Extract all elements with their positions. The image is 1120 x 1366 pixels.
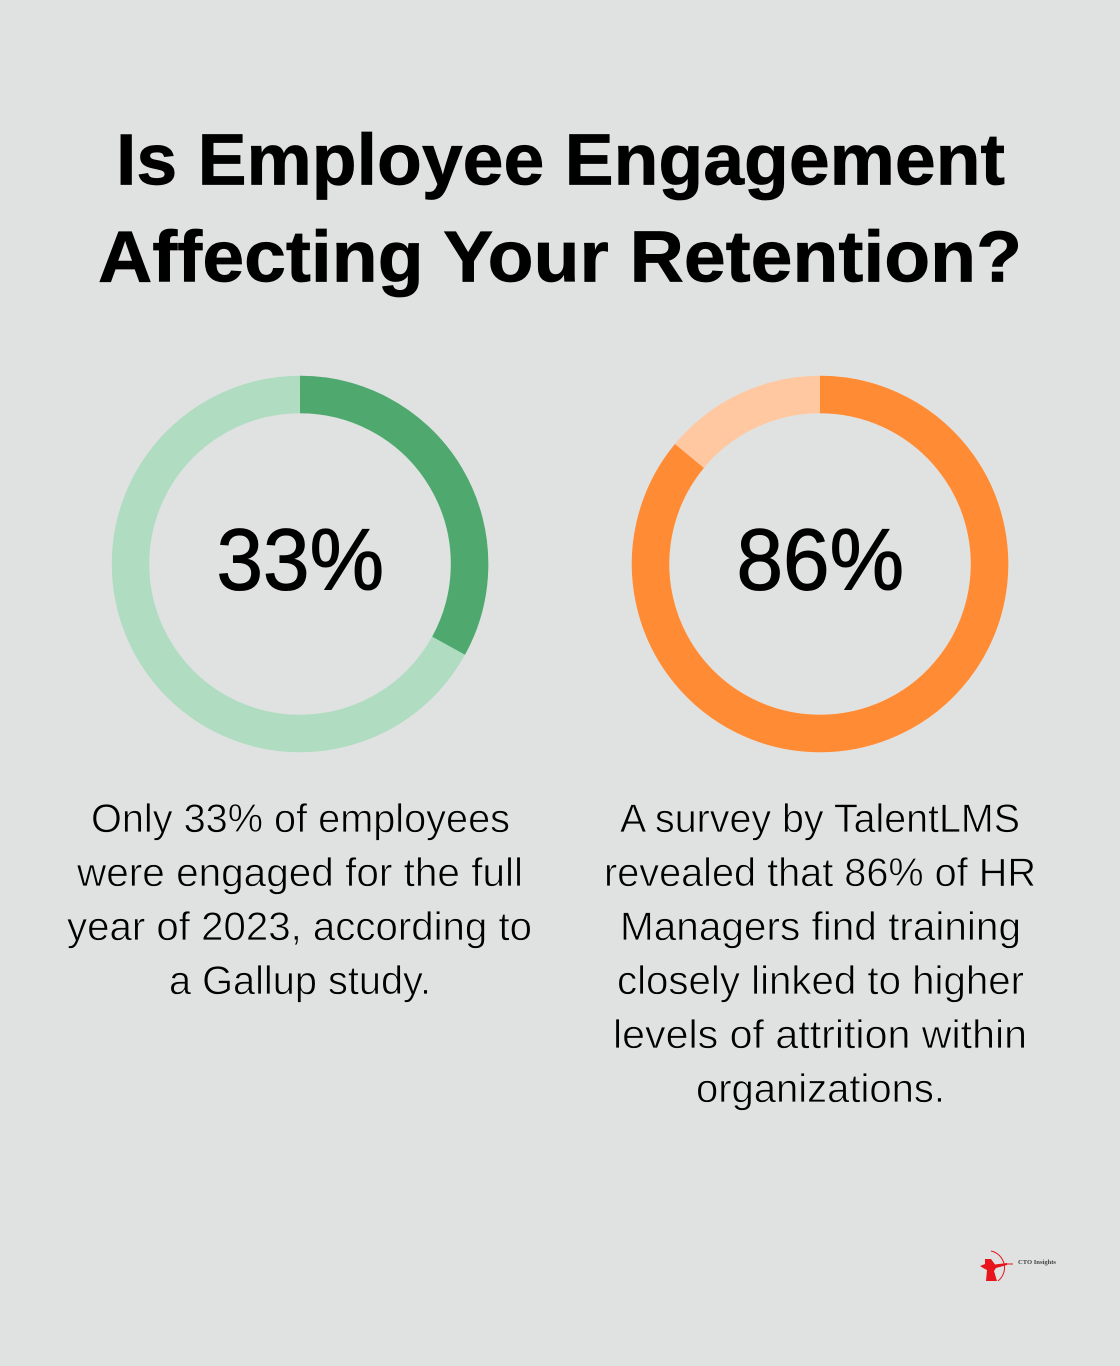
text block: Gallup study: year of 2023, according to <box>67 905 532 949</box>
logo: CTO Insights <box>980 1251 1057 1281</box>
text block: TalentLMS survey: A survey by TalentLMS <box>620 797 1020 841</box>
title: Is Employee Engagement <box>116 120 1005 200</box>
text block: Gallup study <box>67 797 532 1003</box>
text block: Gallup study: a Gallup study. <box>169 959 431 1003</box>
donut chart: 33%: 33% <box>216 512 384 608</box>
text block: TalentLMS survey: revealed that 86% of HR <box>604 851 1036 895</box>
donut chart: 86% <box>650 394 990 734</box>
donut chart: 33% <box>130 394 470 734</box>
text block: TalentLMS survey: Managers find training <box>620 905 1021 949</box>
text block: TalentLMS survey: organizations. <box>696 1067 945 1111</box>
icon: archer <box>980 1251 1013 1281</box>
text block: TalentLMS survey: closely linked to higher <box>617 959 1024 1003</box>
text block: TalentLMS survey: levels of attrition within <box>613 1013 1027 1057</box>
text block: Gallup study: were engaged for the full <box>76 851 523 895</box>
logo: CTO Insights: CTO Insights <box>1018 1260 1057 1266</box>
title <box>98 120 1022 298</box>
panel: 33% engaged <box>67 394 532 1003</box>
text block: TalentLMS survey <box>604 797 1036 1111</box>
panel: 86% training <box>604 394 1036 1111</box>
title: Affecting Your Retention? <box>98 218 1022 298</box>
text block: Gallup study: Only 33% of employees <box>91 797 510 841</box>
donut chart: 86%: 86% <box>736 512 904 608</box>
